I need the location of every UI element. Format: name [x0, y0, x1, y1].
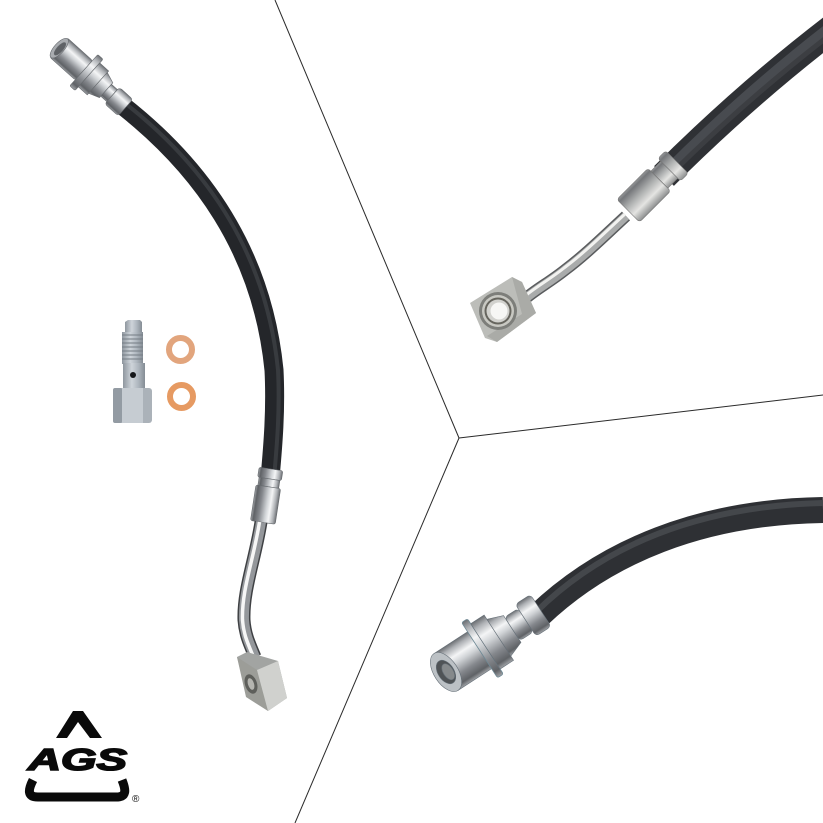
banjo block: [237, 652, 287, 711]
lower crimp ferrule: [250, 467, 283, 524]
copper washer, lower: [170, 385, 193, 408]
ribbed hose: [536, 503, 823, 616]
upper right detail: hose and tube end: [470, 21, 823, 342]
bolt head: [113, 388, 152, 423]
threaded fitting: [418, 583, 559, 706]
bolt tip: [125, 320, 142, 333]
ribbed hose: [664, 21, 823, 181]
bolt shank: [123, 363, 145, 389]
AGS logo: [27, 711, 140, 805]
banjo block: [470, 277, 536, 342]
logo wordmark: AGS: [27, 742, 127, 777]
divider lines: [275, 0, 823, 823]
banjo bolt: [113, 320, 152, 423]
logo bracket: [29, 780, 125, 797]
full hose, left panel: [41, 29, 287, 711]
oil hole: [130, 372, 136, 378]
crimp ferrule: [617, 151, 688, 222]
hose body: [118, 100, 279, 478]
registered mark: ®: [132, 794, 140, 805]
bolt thread: [122, 332, 143, 364]
logo chevron: [56, 711, 102, 738]
metal tube: [524, 214, 626, 299]
lower right detail: hose and threaded fitting: [418, 503, 823, 706]
metal tube: [242, 522, 261, 657]
top fitting: [41, 29, 140, 123]
copper washer, upper: [169, 338, 192, 361]
